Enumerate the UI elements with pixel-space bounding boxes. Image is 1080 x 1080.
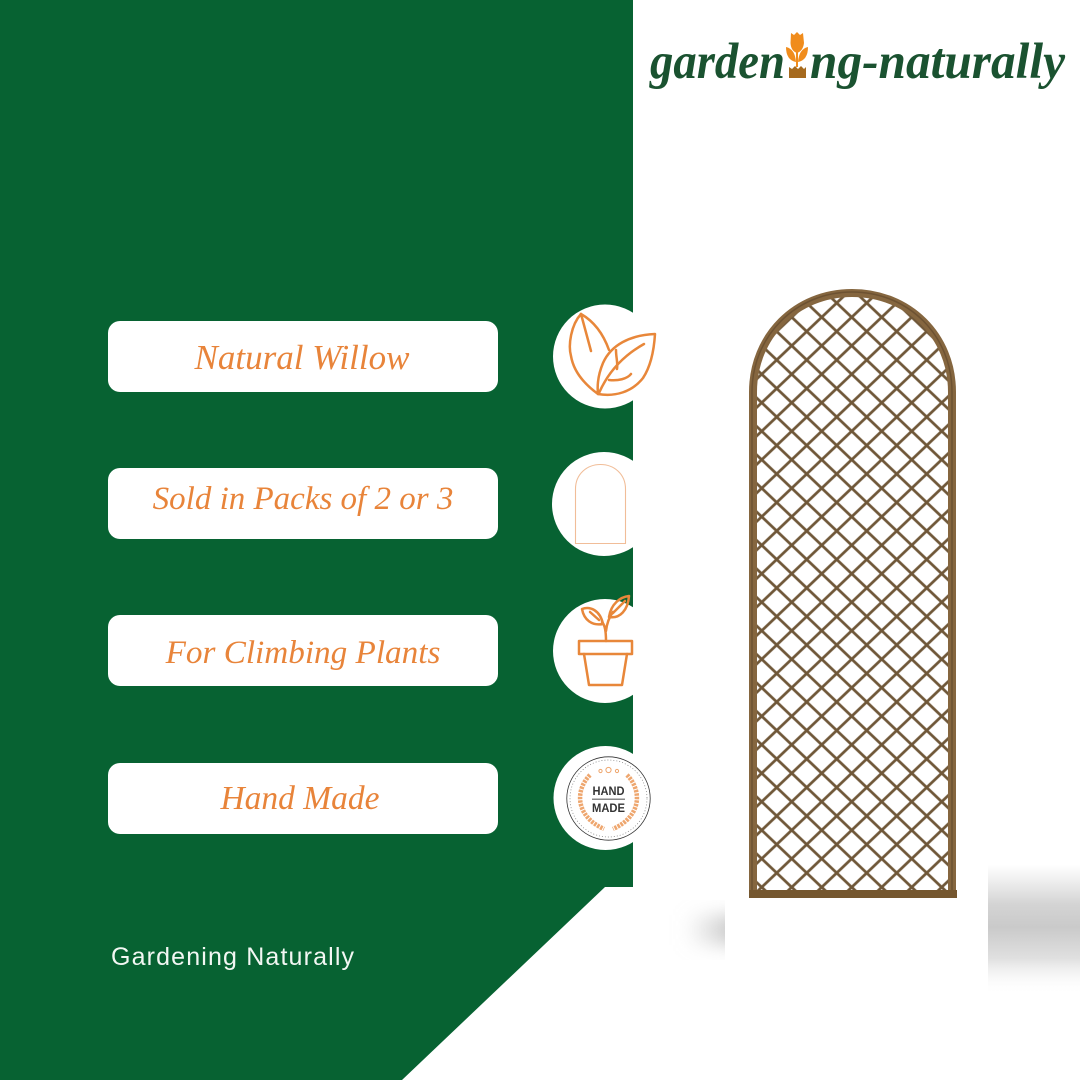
feature pill: For Climbing Plants [108, 615, 498, 686]
badge text: HAND [592, 786, 624, 798]
footer text: Gardening Naturally [111, 943, 355, 971]
feature pill: Hand Made: Hand Made [220, 780, 380, 817]
icon: plant in pot [553, 594, 634, 703]
logo icon: tulip in pot [786, 32, 808, 78]
feature pill: Sold in Packs of 2 or 3 [108, 468, 498, 539]
badge wreath [580, 775, 637, 829]
product: arched willow trellis [749, 289, 957, 898]
frame [753, 293, 952, 895]
icon: hand made badge [554, 746, 651, 850]
logo: gardening-naturally [649, 32, 1066, 90]
feature pill: Hand Made [108, 763, 498, 834]
badge text [592, 786, 625, 815]
badge stars [599, 767, 619, 773]
shadow: right of product [988, 873, 1080, 976]
feature pill: Natural Willow: Natural Willow [195, 338, 409, 377]
frame inner rod [752, 292, 952, 895]
logo wordmark: garden [649, 34, 785, 90]
feature pill: Sold in Packs of 2 or 3: Sold in Packs of 2 or 3 [153, 481, 453, 517]
icon: leaves [553, 304, 656, 408]
icon: arched trellis outline [552, 452, 633, 556]
shadow: left of product [692, 907, 725, 953]
lattice [757, 297, 948, 890]
feature pill: For Climbing Plants: For Climbing Plants [166, 634, 440, 671]
bottom rail [749, 890, 957, 898]
logo wordmark: ng-naturally [810, 34, 1065, 90]
badge text: MADE [592, 803, 625, 815]
logo wordmark [649, 34, 1065, 90]
feature pill: Natural Willow [108, 321, 498, 392]
